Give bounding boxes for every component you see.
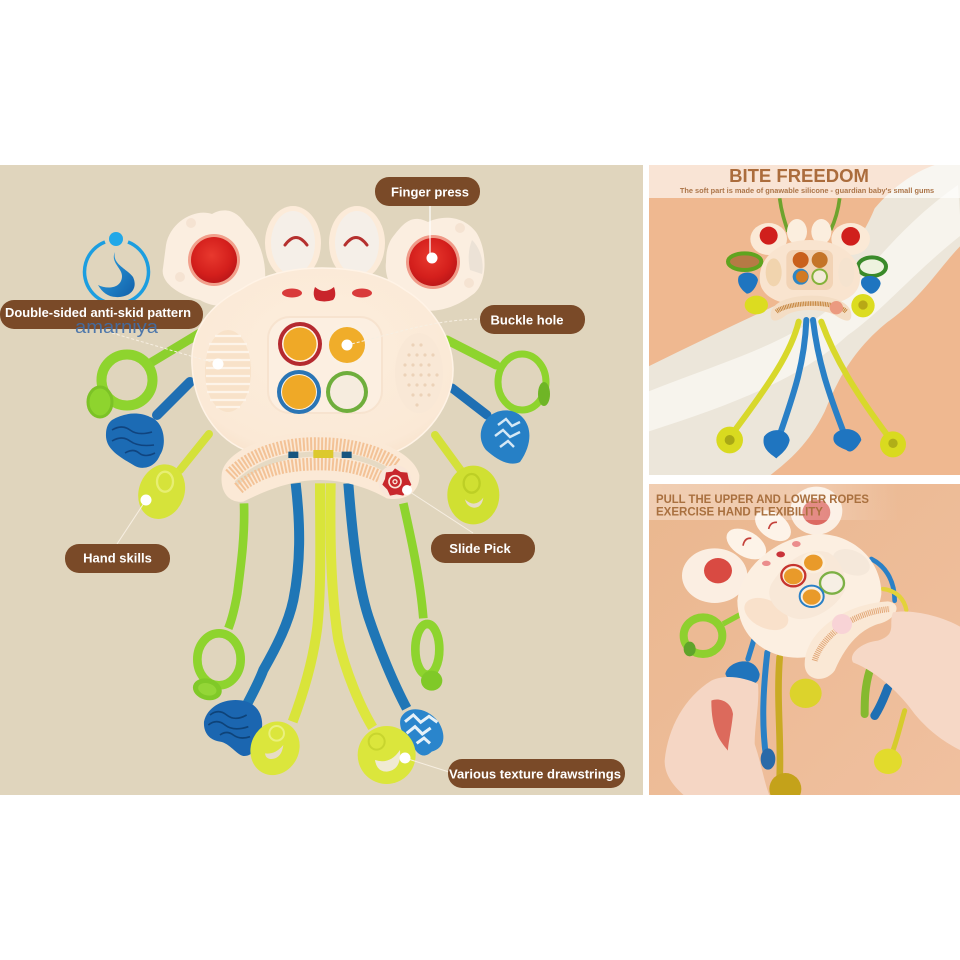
green right string and ring — [403, 503, 442, 691]
toy body — [750, 219, 870, 321]
toy: four round buttons — [277, 322, 369, 414]
main panel background — [0, 165, 643, 795]
label: Double-sided anti-skid pattern — [0, 300, 203, 329]
label: Various texture drawstrings — [448, 759, 625, 788]
lower right blue teether — [400, 709, 443, 756]
panel: pull ropes photo — [649, 484, 960, 805]
label: Buckle hole — [480, 305, 585, 334]
header band — [649, 165, 960, 198]
toy: button tray — [268, 317, 382, 413]
toy: slide pick arch — [221, 432, 419, 502]
lower left disc — [242, 713, 308, 783]
label: Various texture drawstrings: Various texture drawstrings — [449, 766, 621, 782]
heading: hand flexibility: EXERCISE HAND FLEXIBILITY — [656, 506, 823, 518]
label: Hand skills: Hand skills — [83, 550, 152, 566]
callout lines and dots — [112, 205, 480, 772]
hanging drawstrings — [731, 320, 890, 438]
right hand — [852, 611, 960, 751]
yellow right string — [330, 483, 373, 727]
toy body — [737, 534, 897, 679]
icon: right blue teether — [481, 410, 529, 464]
icon: left blue heart teether — [106, 414, 164, 468]
label: Double-sided anti-skid pattern: Double-sided anti-skid pattern — [5, 305, 191, 320]
blue left string — [247, 483, 299, 705]
upper right disc — [447, 466, 499, 524]
label: Hand skills — [65, 544, 170, 573]
blue right string — [348, 483, 407, 708]
toy and hands scene — [665, 487, 960, 805]
toy: face — [282, 287, 372, 302]
header band — [649, 484, 872, 520]
toy: bunny ears — [265, 206, 385, 280]
teethers — [716, 253, 906, 458]
label: Finger press: Finger press — [391, 184, 469, 200]
left palm shadow — [711, 699, 733, 751]
label: Finger press — [375, 177, 480, 206]
heading: bite freedom: BITE FREEDOM — [729, 165, 869, 186]
toy: main product illustration — [88, 206, 550, 784]
left green teether — [684, 614, 741, 656]
toy: upper side strings and teethers — [88, 333, 550, 472]
lower right disc — [358, 726, 416, 784]
logo wordmark: amarniya — [75, 317, 159, 337]
icon: slide rosette — [378, 465, 412, 498]
yellow left string — [293, 483, 320, 722]
toy: right pop ear — [386, 218, 485, 311]
pop ears and bunny ears — [682, 487, 842, 603]
heading: pull ropes: PULL THE UPPER AND LOWER ROPES — [656, 493, 869, 506]
green left string and ring — [190, 503, 244, 703]
teether discs — [725, 661, 902, 805]
subheading: The soft part is made of gnawable silicone - guardian baby's small gums — [680, 186, 934, 195]
label: Slide Pick: Slide Pick — [449, 541, 511, 556]
upper left disc — [130, 457, 193, 526]
panel: bite freedom photo — [648, 165, 960, 477]
toy: left pop ear — [163, 210, 265, 306]
lower strings, teethers and discs — [130, 457, 499, 784]
hanging strings — [748, 559, 906, 777]
label: Slide Pick — [431, 534, 535, 563]
label: Buckle hole: Buckle hole — [491, 312, 563, 328]
silk ribbon — [648, 165, 960, 477]
toy: right dotted pad — [395, 333, 443, 413]
logo watermark — [84, 232, 148, 304]
lower left blue heart — [204, 700, 262, 756]
green top strings — [780, 198, 840, 232]
toy: left anti-skid vent — [205, 330, 251, 412]
left hand — [665, 677, 770, 796]
toy: body — [192, 268, 453, 458]
toy photo scene — [648, 165, 960, 477]
